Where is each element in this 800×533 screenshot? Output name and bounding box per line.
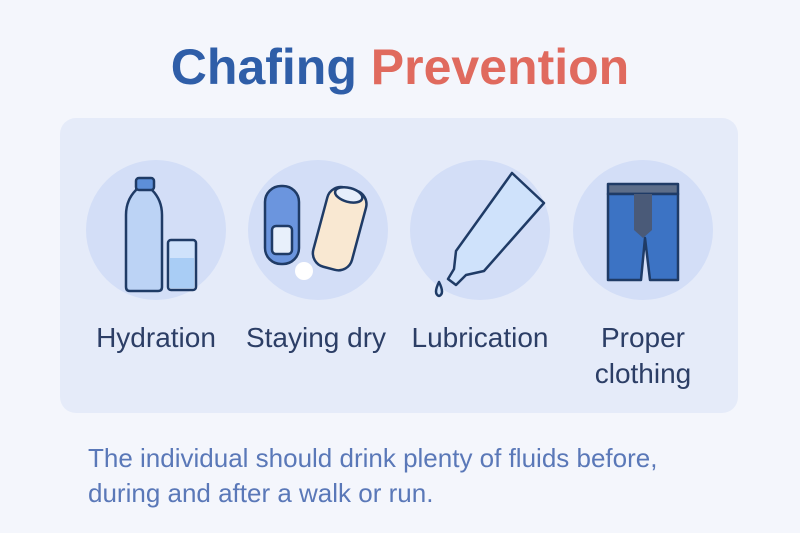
footer text: The individual should drink plenty of fluids before, [88, 443, 657, 473]
label: staying dry: Staying dry [246, 322, 386, 353]
title: Chafing Prevention [171, 39, 629, 95]
label: clothing [595, 322, 691, 389]
label: hydration: Hydration [96, 322, 216, 353]
icons [86, 160, 713, 300]
icon: lubrication [410, 160, 550, 300]
panel: tips [60, 118, 738, 413]
label: clothing: Proper [601, 322, 685, 353]
icon: staying dry [248, 160, 388, 300]
footer text: during and after a walk or run. [88, 478, 433, 508]
footer text [88, 443, 657, 508]
label: clothing: clothing [595, 358, 691, 389]
icon: hydration [86, 160, 226, 300]
label: lubrication: Lubrication [412, 322, 548, 353]
icon: clothing [573, 160, 713, 300]
